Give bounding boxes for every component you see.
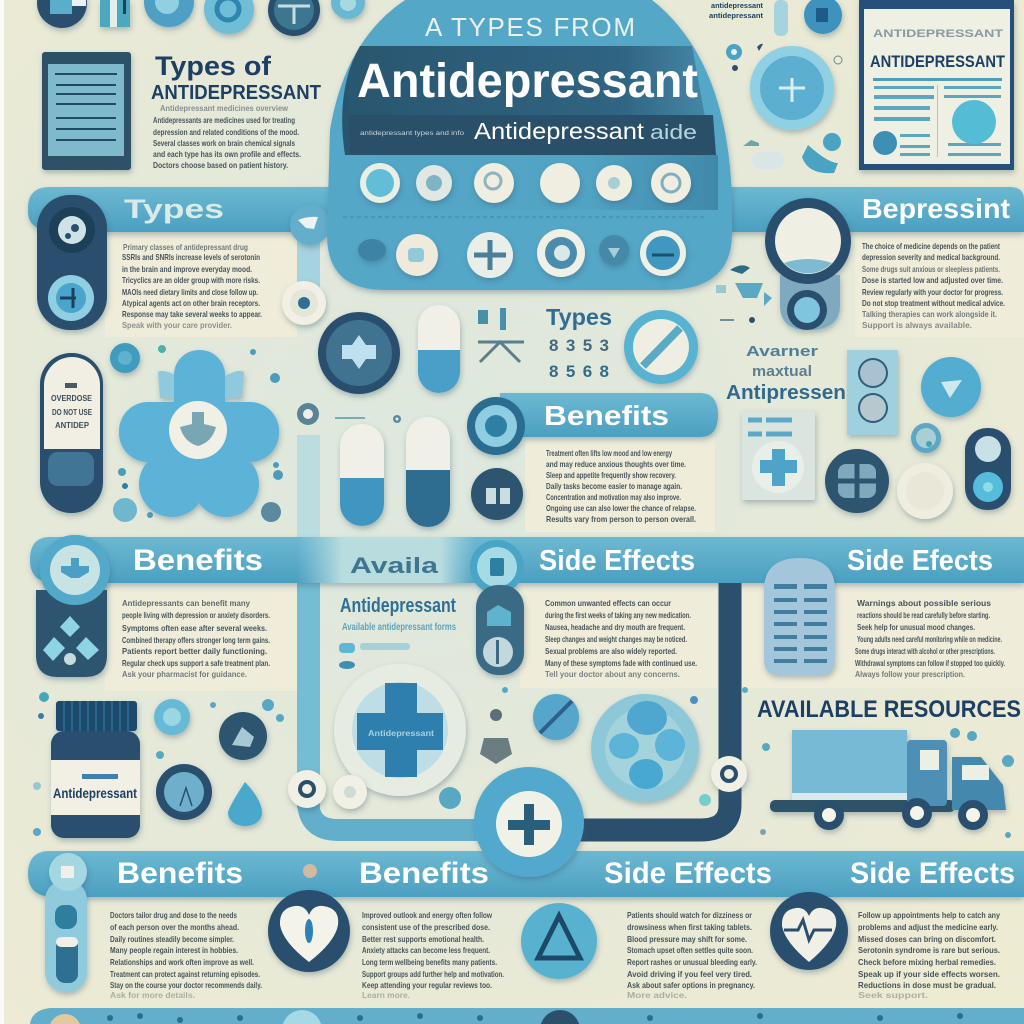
icon: medicine bottle [51, 701, 140, 838]
text block: benefits mid: Concentration and motivation may also improve. [546, 492, 681, 502]
text block: types: in the brain and improve everyday mood. [122, 264, 252, 274]
bar: types [28, 187, 335, 232]
text block: bottom 2 [362, 910, 504, 1000]
mark: schematic [478, 308, 524, 362]
icon: heart disc [268, 890, 350, 972]
icon: ring nodes [288, 756, 747, 809]
label: side effects right: Side Efects [847, 545, 993, 577]
bar: benefits mid [467, 393, 718, 455]
text block: benefits left: Ask your pharmacist for guidance. [122, 669, 247, 679]
label: types: Types [124, 194, 224, 224]
text block: depressant: Talking therapies can work alongside it. [862, 309, 997, 319]
text block: benefits left: Symptoms often ease after several weeks. [122, 623, 267, 633]
text block: benefits mid: Ongoing use can also lower the chance of relapse. [546, 503, 696, 513]
title band [342, 46, 712, 155]
icon: medical card [742, 411, 815, 500]
text block: bottom 3 [627, 910, 757, 1000]
icon: capsule pair [340, 417, 450, 527]
text block: bottom 3: Avoid driving if you feel very tired. [627, 969, 752, 979]
icon: blister pack [847, 350, 898, 435]
text block: types: SSRIs and SNRIs increase levels of serotonin [122, 252, 260, 262]
text block: bottom 1: Daily routines steadily become simpler. [110, 934, 234, 944]
top icon row [37, 0, 365, 36]
icon: heartbeat disc [770, 892, 848, 970]
icon: dark lung [471, 468, 523, 520]
text block: types: Response may take several weeks to appear. [122, 309, 262, 319]
text: antidepressant note [726, 343, 846, 404]
text block: intro: Antidepressant medicines overview [160, 103, 288, 113]
text: types small: 8353 [549, 336, 609, 355]
text: antidepressant center: Antidepressant [340, 595, 456, 617]
icon: bar disc mid [470, 540, 524, 594]
icon: right dark capsule [965, 428, 1011, 510]
text block: benefits left: Antidepressants can benefit many [122, 598, 250, 608]
text block: bottom 2: Anxiety attacks can become less frequent. [362, 945, 490, 955]
text block: types: MAOIs need dietary limits and close follow up. [122, 287, 258, 297]
icon: top 1 [37, 0, 87, 28]
text block: benefits mid: Daily tasks become easier to manage again. [546, 481, 682, 491]
icon: center hub [474, 767, 584, 877]
text block: bottom 3: Ask about safer options in pregnancy. [627, 980, 755, 990]
text block: bottom 4: Check before mixing herbal remedies. [858, 957, 996, 967]
text: antidepressant note: Avarner [746, 343, 818, 360]
icon: dark disc with plus [318, 312, 400, 394]
text block: side effects mid: during the first weeks of taking any new medication. [545, 610, 691, 620]
icon: cream disc [282, 281, 326, 325]
text block: bottom 1: Doctors tailor drug and dose to the needs [110, 910, 237, 920]
text: antidepressant note: Antipressen [726, 382, 846, 404]
heading: types of antidepressant [151, 51, 321, 104]
icon: right magnifier [765, 198, 851, 330]
panel: title: Antidepressant [474, 118, 645, 144]
icon: top 6 [331, 0, 365, 19]
icon: top 5 [268, 0, 320, 36]
scattered flower marks [113, 345, 401, 522]
text block: bottom 4: Follow up appointments help to catch any [858, 910, 1000, 920]
title: Antidepressant [357, 55, 698, 108]
icon: connector node [290, 205, 330, 245]
icon: small teal disc [911, 423, 941, 453]
icon: dark cross disc [825, 449, 889, 513]
heading: types of antidepressant: Types of [155, 51, 272, 81]
text block: side effects mid: Many of these symptoms fade with continued use. [545, 658, 697, 668]
text block: bottom 2: Keep attending your regular reviews too. [362, 980, 492, 990]
icon: left tube with pills [45, 853, 87, 992]
icon: document tablet [42, 52, 131, 170]
label: side effects 2: Side Effects [850, 857, 1015, 890]
text block: bottom 3: Patients should watch for dizziness or [627, 910, 753, 920]
bar: right heading [725, 187, 1024, 232]
text block: side effects mid: Sexual problems are also widely reported. [545, 646, 677, 656]
text block: bottom 1: Relationships and work often improve as well. [110, 957, 254, 967]
scattered marks right [716, 265, 772, 323]
text block: bottom 2: Support groups add further help and motivation. [362, 969, 504, 979]
icon: big left capsule: DO NOT USE [52, 408, 93, 417]
icon: crossed disc [533, 694, 579, 740]
text block: bottom 1: Stay on the course your doctor recommends daily. [110, 980, 262, 990]
bar: benefits side effects [30, 535, 1024, 605]
text block: benefits left [122, 598, 270, 679]
panel: newspaper: ANTIDEPRESSANT [870, 52, 1006, 71]
bar: lower headings [28, 851, 1024, 897]
text block: bottom 4: Speak up if your side effects worsen. [858, 969, 1000, 979]
heading: types of antidepressant: ANTIDEPRESSANT [151, 82, 321, 104]
text: types small: Types [546, 304, 612, 330]
text: types small: 8568 [549, 362, 609, 381]
text block: intro: Doctors choose based on patient history. [153, 160, 288, 170]
text block: bottom 1: Treatment can protect against returning episodes. [110, 969, 260, 979]
text: types small [546, 304, 612, 381]
text block: side effects mid: Nausea, headache and dry mouth are frequent. [545, 622, 685, 632]
pills upper row [360, 163, 691, 203]
text block: bottom 4: Missed doses can bring on discomfort. [858, 934, 996, 944]
icon: big left capsule: ANTIDEP [55, 421, 90, 430]
text block: intro: and each type has its own profile and effects. [153, 149, 301, 159]
text block: benefits left: people living with depression or anxiety disorders. [122, 610, 270, 620]
icon: small pills center [476, 585, 524, 675]
text block: benefits left: Patients report better daily functioning. [122, 646, 267, 656]
icon: pills tray [591, 694, 699, 802]
icon: warning triangle disc [521, 903, 597, 979]
text block: bottom 2: Better rest supports emotional health. [362, 934, 484, 944]
text: antidepressant center: Available antidepressant forms [342, 622, 456, 633]
panel: left icon pair [36, 590, 107, 677]
text block: side effects right: Seek help for unusual mood changes. [857, 622, 975, 632]
icon: left dark capsule [37, 195, 107, 330]
small decorative dots [33, 687, 1014, 838]
icon: top 4 [204, 0, 254, 34]
icon: small discs lower left [154, 699, 267, 826]
icon: cream round pill [897, 463, 953, 519]
text block: types: Atypical agents act on other brain receptors. [122, 298, 260, 308]
icon: top 3 [144, 0, 194, 27]
text block: bottom 3: Blood pressure may shift for some. [627, 934, 747, 944]
text block: bottom 4: Serotonin syndrome is rare but serious. [858, 945, 1000, 955]
icon: big left capsule [40, 353, 103, 513]
bar: bottom strip [30, 1008, 1024, 1024]
text: antidepressant note: maxtual [752, 363, 812, 380]
label: benefits: Benefits [544, 400, 669, 431]
label: side effects 1: Side Effects [604, 857, 772, 890]
text block: bottom 4: Seek support. [858, 990, 928, 1000]
text block: side effects mid: Common unwanted effects can occur [545, 598, 672, 608]
icon: capsule top [418, 305, 460, 393]
text block: intro: depression and related conditions of the mood. [153, 127, 299, 137]
icon: top 2 [100, 0, 130, 27]
text block: benefits mid: and may reduce anxious thoughts over time. [546, 459, 686, 469]
panel: newspaper: ANTIDEPRESSANT [873, 28, 1003, 40]
icon: bag person [480, 709, 512, 764]
label: bottle: Antidepressant [53, 785, 137, 801]
text block: bottom 4: problems and adjust the medicine early. [858, 922, 998, 932]
icon: bar disc [40, 535, 110, 605]
text block: bottom 3: More advice. [627, 990, 687, 1000]
icon: small top-right pair [709, 0, 842, 36]
text block: bottom 4: Reductions in dose must be gradual. [858, 980, 996, 990]
text: antidepressant center [339, 595, 456, 669]
small decorative icons near disc [726, 44, 842, 173]
text block: bottom 2: Long term wellbeing benefits many patients. [362, 957, 497, 967]
panel: title: aide [650, 122, 697, 144]
text block: intro: Several classes work on brain chemical signals [153, 138, 295, 148]
text block: benefits mid: Sleep and appetite frequently show recovery. [546, 470, 676, 480]
text block: types [122, 242, 262, 330]
icon: small top-right pair: antidepressant [711, 3, 764, 10]
label: benefits 2: Benefits [359, 857, 489, 890]
icon: small top-right pair: antidepressant [709, 13, 764, 20]
icon: flower [119, 350, 279, 517]
icon: large plus disc [750, 46, 834, 130]
text block: depressant: Support is always available. [862, 320, 972, 330]
text block: side effects mid [545, 598, 697, 679]
label: benefits: Benefits [133, 544, 263, 577]
icon: big plus disc: Antidepressant [368, 729, 434, 738]
icon: bar disc overlay [40, 535, 110, 605]
text block: benefits mid: Treatment often lifts low mood and low energy [546, 448, 672, 458]
kicker: A TYPES FROM [425, 12, 635, 42]
icon: big plus disc [334, 664, 466, 796]
text block: bottom 1: Many people regain interest in hobbies. [110, 945, 238, 955]
icon: arrow disc [921, 357, 981, 417]
label: side effects: Side Effects [539, 545, 695, 577]
text block: side effects mid: Sleep changes and weight changes may be noticed. [545, 634, 687, 644]
icon: no pill [624, 310, 698, 384]
text block: bottom 4 [858, 910, 1000, 1000]
text block: benefits left: Combined therapy offers stronger long term gains. [122, 635, 270, 645]
pills lower row [358, 229, 686, 278]
label: benefits 1: Benefits [117, 857, 243, 890]
text block: types: Speak with your care provider. [122, 320, 232, 330]
icon: big left capsule: OVERDOSE [51, 394, 93, 403]
panel: newspaper [859, 0, 1014, 170]
text block: bottom 3: drowsiness when first taking tablets. [627, 922, 752, 932]
text block: intro: Antidepressants are medicines used for treating [153, 115, 295, 125]
text block: bottom 1: of each person over the months ahead. [110, 922, 239, 932]
text block: benefits mid: Results vary from person to person overall. [546, 514, 696, 524]
text block: types: Tricyclics are an older group with more risks. [122, 275, 260, 285]
text block: intro [153, 103, 301, 170]
subtitle: antidepressant types and info [360, 130, 464, 137]
text block: depressant [862, 241, 1005, 330]
text block: bottom 3: Stomach upset often settles quite soon. [627, 945, 753, 955]
text block: side effects right: Always follow your prescription. [855, 669, 965, 679]
label: available: Availa [350, 553, 439, 578]
label: depressant: Bepressint [862, 193, 1010, 224]
text block: benefits mid [546, 448, 696, 524]
icon: clipboard capsule [764, 558, 835, 675]
panel: title [327, 0, 732, 290]
text block: side effects mid: Tell your doctor about any concerns. [545, 669, 680, 679]
text block: side effects right [855, 598, 1005, 679]
text block: bottom 1: Ask for more details. [110, 990, 195, 1000]
connector tubes [297, 232, 730, 830]
text block: side effects right: Warnings about possible serious [857, 598, 991, 608]
text block: bottom 2: Learn more. [362, 990, 410, 1000]
text block: bottom 2: Improved outlook and energy often follow [362, 910, 492, 920]
text block: benefits left: Regular check ups support a safe treatment plan. [122, 658, 270, 668]
icon: small disc near flower [110, 343, 140, 373]
icon: delivery truck [770, 730, 1006, 830]
text block: types: Primary classes of antidepressant drug [123, 242, 248, 252]
text block: bottom 3: Report rashes or unusual bleeding early. [627, 957, 757, 967]
text block: bottom 1 [110, 910, 262, 1000]
text block: bottom 2: consistent use of the prescribed dose. [362, 922, 490, 932]
